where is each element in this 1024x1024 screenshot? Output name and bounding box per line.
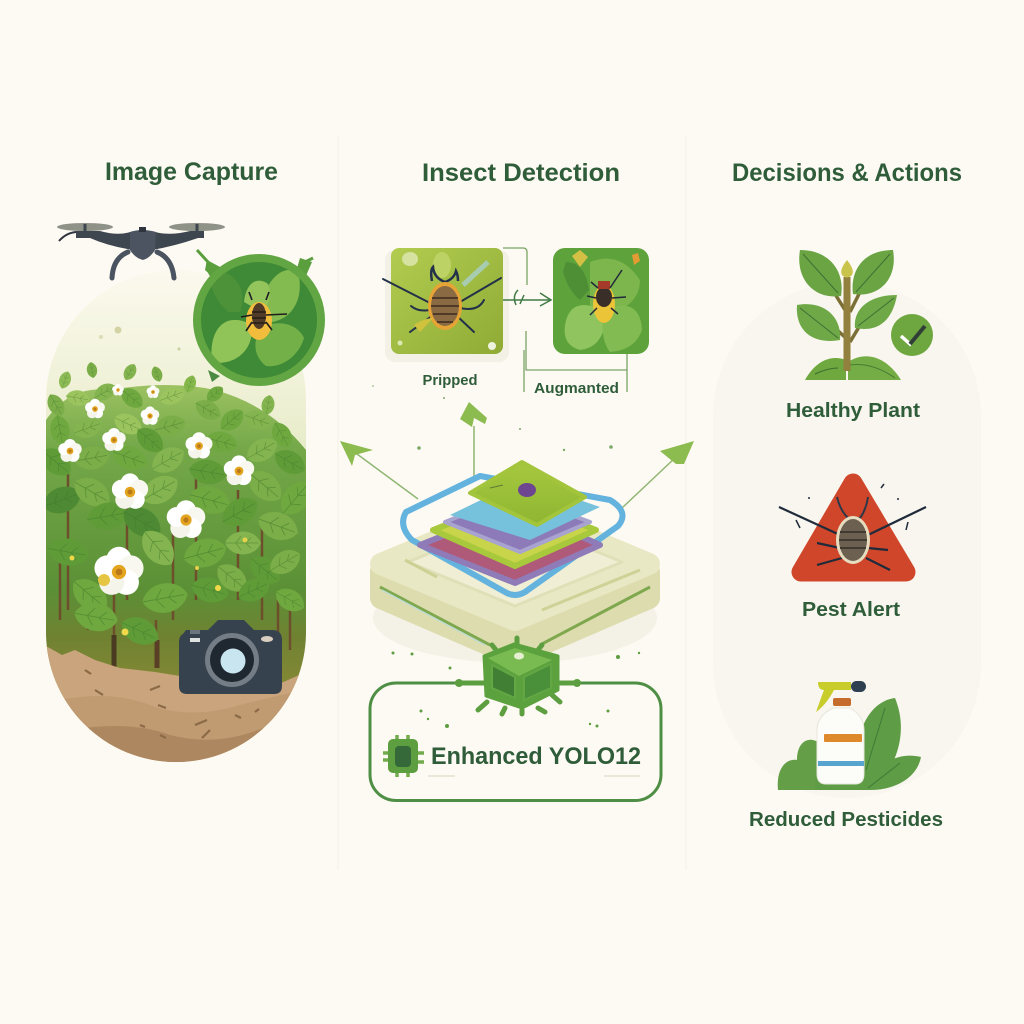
arrows: outputs from model: [340, 385, 694, 508]
panel: insect detection: [340, 159, 694, 800]
icon: camera: [179, 620, 282, 694]
label: augmented: Augmanted: [534, 381, 619, 397]
inset: magnified leaf with insect: [193, 250, 325, 386]
label: healthy plant: Healthy Plant: [786, 400, 920, 422]
soil: [46, 646, 306, 770]
label: pest alert: Pest Alert: [802, 599, 900, 621]
connector lines and arrow: [503, 248, 627, 392]
image card: augmented: [553, 248, 649, 354]
pill background: [713, 282, 981, 798]
icon: chip in label: [383, 735, 424, 777]
infographic canvas: [46, 135, 961, 870]
flowers: [58, 384, 254, 636]
icon: green processor cube: [392, 638, 640, 728]
label: pripped: Pripped: [422, 373, 478, 389]
panel: image capture: [35, 158, 325, 770]
heading: decisions and actions: Decisions & Actions: [732, 159, 962, 187]
icon: pest alert triangle: [779, 483, 926, 572]
label: enhanced YOLO12: Enhanced YOLO12: [431, 743, 641, 770]
icon: healthy plant: [797, 250, 933, 380]
model box: enhanced YOLO12: [370, 683, 661, 800]
icon: drone: [57, 223, 225, 278]
panel: decisions and actions: [713, 159, 981, 831]
heading: insect detection: Insect Detection: [422, 159, 620, 187]
stems: [60, 470, 290, 670]
icon: reduced pesticides bottle: [778, 681, 921, 790]
model stack: platform with layers: [373, 462, 657, 663]
image card: pripped: [383, 248, 509, 362]
label: reduced pesticides: Reduced Pesticides: [749, 809, 943, 831]
leaves: [46, 362, 306, 645]
illustration: flowering plant field in pill: [46, 286, 306, 762]
heading: image capture: Image Capture: [105, 158, 278, 186]
